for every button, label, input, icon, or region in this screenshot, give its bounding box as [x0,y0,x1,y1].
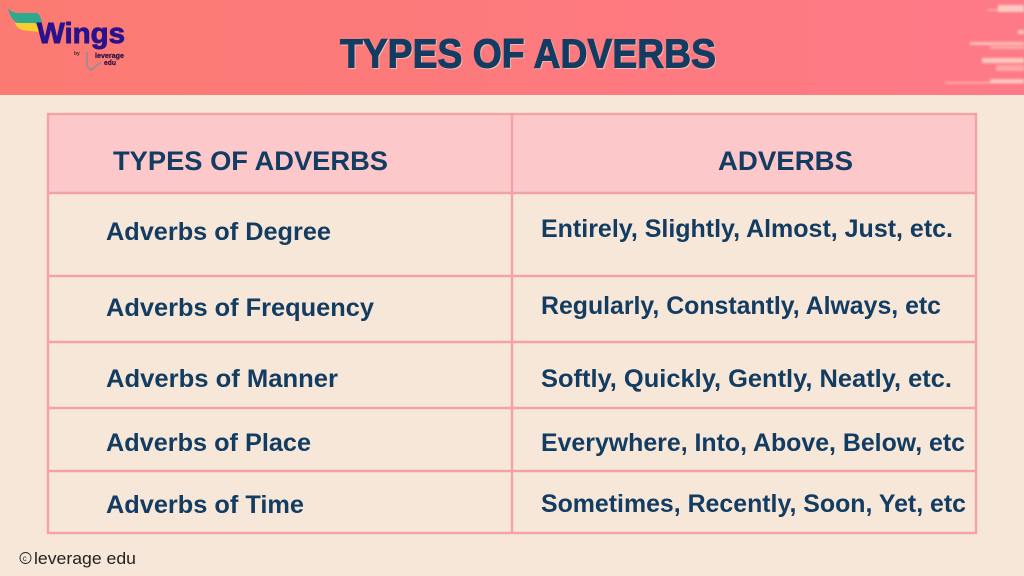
title: TYPES OF ADVERBS [341,32,717,78]
row: manner: Adverbs of Manner [106,365,338,393]
copyright footer: leverage edu [34,549,136,568]
leverage edu wordmark: leverage [95,53,124,60]
title: TYPES OF ADVERBS [340,30,716,76]
row: time: Adverbs of Time [106,491,304,519]
icon: wing [8,7,42,32]
table [48,114,976,533]
header banner [0,0,1024,95]
row: frequency [106,292,941,322]
row: time: Sometimes, Recently, Soon, Yet, etc [541,490,966,518]
row: place [106,429,965,457]
copyright footer: c [23,554,27,563]
column heading: adverbs: ADVERBS [718,146,853,176]
row: place: Adverbs of Place [106,429,311,457]
column heading: types of adverbs: TYPES OF ADVERBS [113,146,388,176]
row: degree: Entirely, Slightly, Almost, Just, etc. [541,215,953,243]
row: manner: Softly, Quickly, Gently, Neatly, etc. [541,365,952,393]
leverage edu wordmark: edu [104,60,116,67]
leverage edu wordmark [95,53,124,67]
row: degree: Adverbs of Degree [106,218,331,246]
row: frequency: Adverbs of Frequency [106,294,374,322]
row: time [106,490,966,519]
row: frequency: Regularly, Constantly, Always, etc [541,292,941,320]
row: degree [106,215,953,246]
wordmark: Wings [37,18,125,50]
row: place: Everywhere, Into, Above, Below, etc [541,429,965,457]
by: by [74,51,80,57]
row: manner [106,365,952,393]
icon: leverage mark [87,52,101,70]
logo: Wings by leverage edu [8,7,125,70]
table header row [48,114,976,193]
